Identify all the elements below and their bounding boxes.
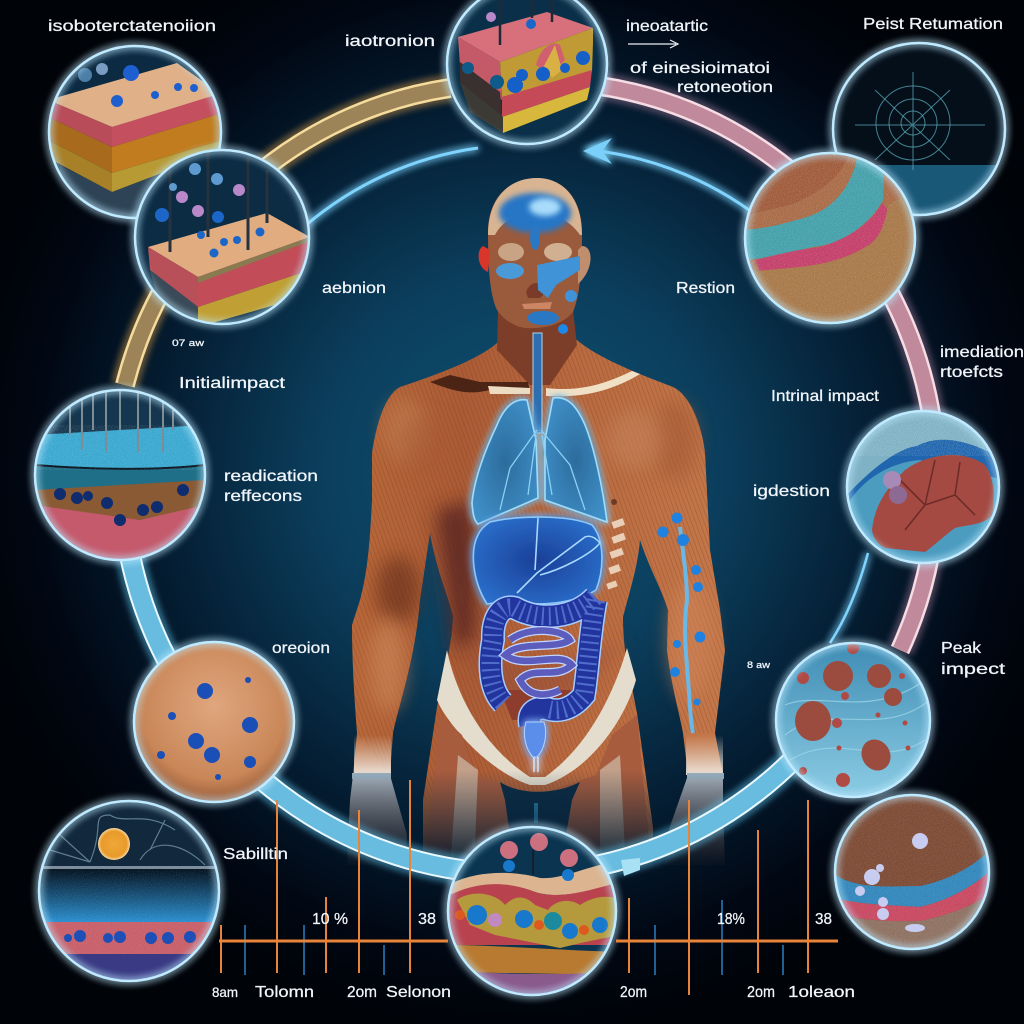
label: top right: Peist Retumation xyxy=(863,16,1003,33)
label: ioleaon: 1oleaon xyxy=(788,984,855,1001)
label: immediate effects line 2: rtoefcts xyxy=(940,364,1003,381)
colon and intestines xyxy=(490,597,596,725)
trachea xyxy=(533,333,542,433)
label: stabilisation: Sabilltin xyxy=(223,846,288,863)
label: medication: readication xyxy=(224,468,318,485)
circle: tissue reaction xyxy=(745,153,915,323)
circle: absorption needles xyxy=(135,150,310,327)
timeline left xyxy=(219,780,448,975)
inner arc with arrow xyxy=(305,138,868,643)
label: selonon: Selonon xyxy=(386,984,451,1001)
ring arc: distribution (pink) xyxy=(600,86,937,650)
label: immediate effects: imediation xyxy=(940,344,1024,361)
circle: liver xyxy=(847,411,1005,563)
circle: tissue with white particles xyxy=(835,795,990,949)
label: absorption: aebnion xyxy=(322,280,386,297)
label: top centre right line 2: of einesioimatoi xyxy=(630,60,770,77)
head xyxy=(479,178,591,328)
circle: absorption skin surface xyxy=(48,46,222,220)
liver and stomach xyxy=(473,517,602,604)
value: 38 right: 38 xyxy=(815,911,832,928)
muscle fibres xyxy=(352,340,725,827)
hands xyxy=(347,775,725,865)
label: reflections: reffecons xyxy=(224,488,302,505)
label: impact: impect xyxy=(941,661,1006,678)
circle: bottom centre tissue xyxy=(448,827,620,1001)
circle: skin with blue particles xyxy=(134,642,294,802)
abdominal muscles xyxy=(606,499,626,590)
label: peak: Peak xyxy=(941,640,982,657)
time: 2am second: 2om xyxy=(620,984,647,1001)
circle: bottom left sun and spikes xyxy=(39,801,219,981)
tag on ring xyxy=(621,858,640,876)
label: initial impact left: Initialimpact xyxy=(179,375,286,392)
time: 2am first: 2om xyxy=(347,984,377,1001)
timeline right xyxy=(616,800,838,995)
label: ingestion: igdestion xyxy=(753,483,830,500)
blood stream on arm xyxy=(658,512,706,733)
value: 38 left: 38 xyxy=(418,911,436,928)
circle: post elimination network xyxy=(833,43,1005,220)
arrow: small pointer xyxy=(628,40,678,48)
collarbones xyxy=(430,371,640,396)
label: erosion: oreoion xyxy=(272,640,330,657)
body silhouette xyxy=(352,340,725,870)
label: initial impact right: Intrinal impact xyxy=(771,388,880,405)
muscle shading xyxy=(370,398,712,720)
label: top centre right: ineoatartic xyxy=(626,18,708,35)
circle: pills in bloodstream xyxy=(776,642,930,797)
wrists xyxy=(352,735,724,779)
ring arc: absorption (yellow) xyxy=(125,88,450,385)
circle: layered tissue with needles xyxy=(35,390,205,560)
lungs xyxy=(472,398,607,524)
value: 10 percent: 10 % xyxy=(312,911,348,928)
pelvis and thighs xyxy=(432,648,648,856)
time: 2am third: 2om xyxy=(747,984,775,1001)
small note left: 07 aw xyxy=(172,338,205,348)
lower cycle ring xyxy=(128,545,810,874)
human body figure xyxy=(347,178,725,870)
neck xyxy=(497,310,577,385)
label: top centre left: iaotronion xyxy=(345,33,435,50)
blue sparkle on face xyxy=(496,193,580,334)
value: 18 percent: 18% xyxy=(717,911,745,928)
label: tolomn: Tolomn xyxy=(255,984,314,1001)
label: top left: isoboterctatenoiion xyxy=(48,18,216,35)
small note right: 8 aw xyxy=(747,660,771,670)
label: reaction: Restion xyxy=(676,280,735,297)
time: 8am: 8am xyxy=(212,984,238,1000)
circle: top centre tissue xyxy=(447,0,607,144)
label: top centre right line 3: retoneotion xyxy=(677,79,773,96)
rectum xyxy=(524,722,546,772)
upper cycle ring xyxy=(125,86,937,650)
